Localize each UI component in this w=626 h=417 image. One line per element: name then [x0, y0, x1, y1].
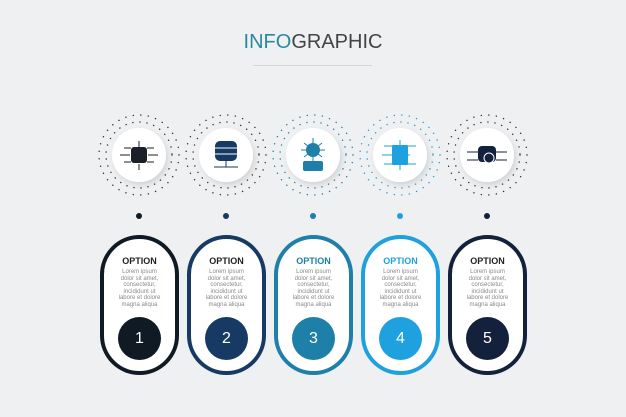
option 2: OPTION [209, 256, 244, 266]
option 1: labore et dolore [119, 295, 160, 301]
icon 5 [447, 115, 527, 195]
option 5: Lorem ipsum [470, 269, 505, 275]
option 1 [100, 235, 179, 375]
icon 3 [273, 115, 353, 195]
dots [136, 213, 142, 219]
option 2: incididunt ut [210, 289, 243, 295]
option 5: incididunt ut [471, 289, 504, 295]
option 4 [361, 235, 440, 375]
option 4: magna aliqua [382, 302, 419, 308]
option 5: dolor sit amet, [469, 276, 506, 282]
option 5: consectetur, [471, 282, 504, 288]
icons row [98, 114, 528, 219]
option 4: 4 [396, 330, 405, 347]
option 5 [448, 235, 527, 375]
option 2: dolor sit amet, [208, 276, 245, 282]
option 2: labore et dolore [206, 295, 247, 301]
icon 4 [360, 115, 440, 195]
option 2: magna aliqua [208, 302, 245, 308]
option 5: labore et dolore [467, 295, 508, 301]
option 4: Lorem ipsum [383, 269, 418, 275]
option 2: 2 [222, 330, 231, 347]
option 3: incididunt ut [297, 289, 330, 295]
option 4: dolor sit amet, [382, 276, 419, 282]
option 1: incididunt ut [123, 289, 156, 295]
option 4: OPTION [383, 256, 418, 266]
option 3: labore et dolore [293, 295, 334, 301]
title: INFOGRAPHIC [244, 31, 382, 53]
option 1: Lorem ipsum [122, 269, 157, 275]
icon 1 [99, 115, 179, 195]
option 3: magna aliqua [295, 302, 332, 308]
option 4: consectetur, [384, 282, 417, 288]
option 2: Lorem ipsum [209, 269, 244, 275]
option 1: consectetur, [123, 282, 156, 288]
option 1: dolor sit amet, [121, 276, 158, 282]
icon 2 [186, 115, 266, 195]
option 3: consectetur, [297, 282, 330, 288]
option 1: 1 [135, 330, 144, 347]
option 3: 3 [309, 330, 318, 347]
option 2: consectetur, [210, 282, 243, 288]
option 3 [274, 235, 353, 375]
option 1: magna aliqua [121, 302, 158, 308]
option 5: OPTION [470, 256, 505, 266]
option 3: Lorem ipsum [296, 269, 331, 275]
option 3: OPTION [296, 256, 331, 266]
option 5: 5 [483, 330, 492, 347]
option 1: OPTION [122, 256, 157, 266]
option 2 [187, 235, 266, 375]
option 5: magna aliqua [469, 302, 506, 308]
option 4: labore et dolore [380, 295, 421, 301]
option 3: dolor sit amet, [295, 276, 332, 282]
option 4: incididunt ut [384, 289, 417, 295]
